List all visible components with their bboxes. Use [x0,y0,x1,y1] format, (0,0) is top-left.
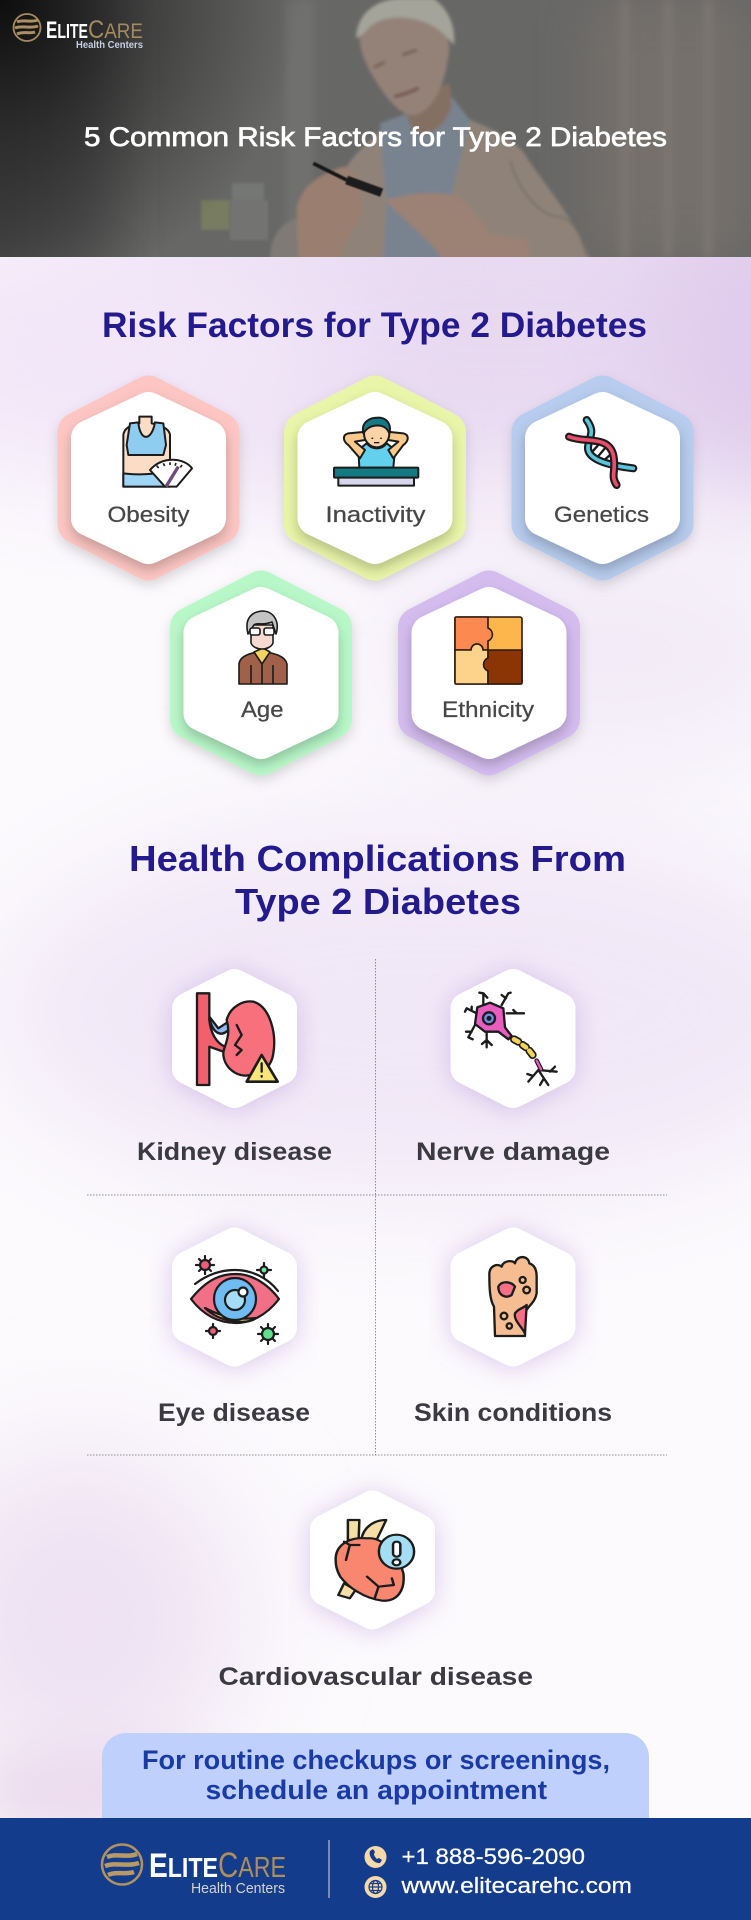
risk factor: obesity [78,396,220,560]
footer logo: CARE [218,1846,286,1885]
header logo [14,14,143,51]
icon: hand with rash [489,1257,537,1336]
icon: globe [364,1876,386,1898]
icon: elderly man [239,611,287,684]
header logo: ELITE [46,17,88,44]
risk factor: age [190,590,332,756]
icon: puzzle [455,617,522,684]
call to action: For routine checkups or screenings, [142,1745,610,1775]
icon: kidney with warning [197,993,278,1085]
phone number: +1 888-596-2090 [402,1844,585,1869]
icon: person lying with hands behind head [334,418,418,486]
heading: health complications [129,838,626,922]
footer logo: Health Centers [191,1880,285,1897]
icon: body with scale [123,417,192,487]
icon: heart with alert [336,1520,414,1601]
hero photo: woman testing blood sugar [0,0,751,260]
icon: infected eye [191,1256,279,1344]
label: Ethnicity [442,697,534,722]
icon: DNA helix [569,420,633,485]
footer logo [102,1844,286,1897]
label: Age [241,697,284,722]
label: Eye disease [158,1399,310,1427]
risk factor: genetics [532,396,674,560]
icon: neuron [465,993,557,1085]
label: Nerve damage [416,1138,610,1166]
heading: health complications: Type 2 Diabetes [235,881,521,922]
heading: health complications: Health Complications From [129,838,626,879]
complication: nerve damage [416,985,610,1166]
call to action: schedule an appointment [206,1775,547,1805]
label: Skin conditions [414,1399,612,1427]
heading: risk factors: Risk Factors for Type 2 Diabetes [102,306,647,345]
label: Cardiovascular disease [218,1663,533,1691]
label: Kidney disease [137,1138,332,1166]
footer logo: ELITE [149,1847,218,1885]
title: 5 Common Risk Factors for Type 2 Diabetes [84,122,667,152]
footer [0,1818,751,1920]
label: Genetics [554,502,649,527]
complication: kidney disease [137,985,332,1166]
complication: eye disease [158,1244,310,1427]
risk factor: inactivity [304,396,446,560]
website: www.elitecarehc.com [400,1873,632,1898]
label: Obesity [108,502,190,527]
risk factor: ethnicity [418,590,560,756]
complication: skin conditions [414,1244,612,1427]
header logo: Health Centers [76,40,143,51]
call to action [102,1733,649,1818]
complication: cardiovascular disease [218,1506,533,1691]
icon: phone [364,1846,386,1868]
header logo: CARE [88,16,143,44]
label: Inactivity [326,502,426,527]
